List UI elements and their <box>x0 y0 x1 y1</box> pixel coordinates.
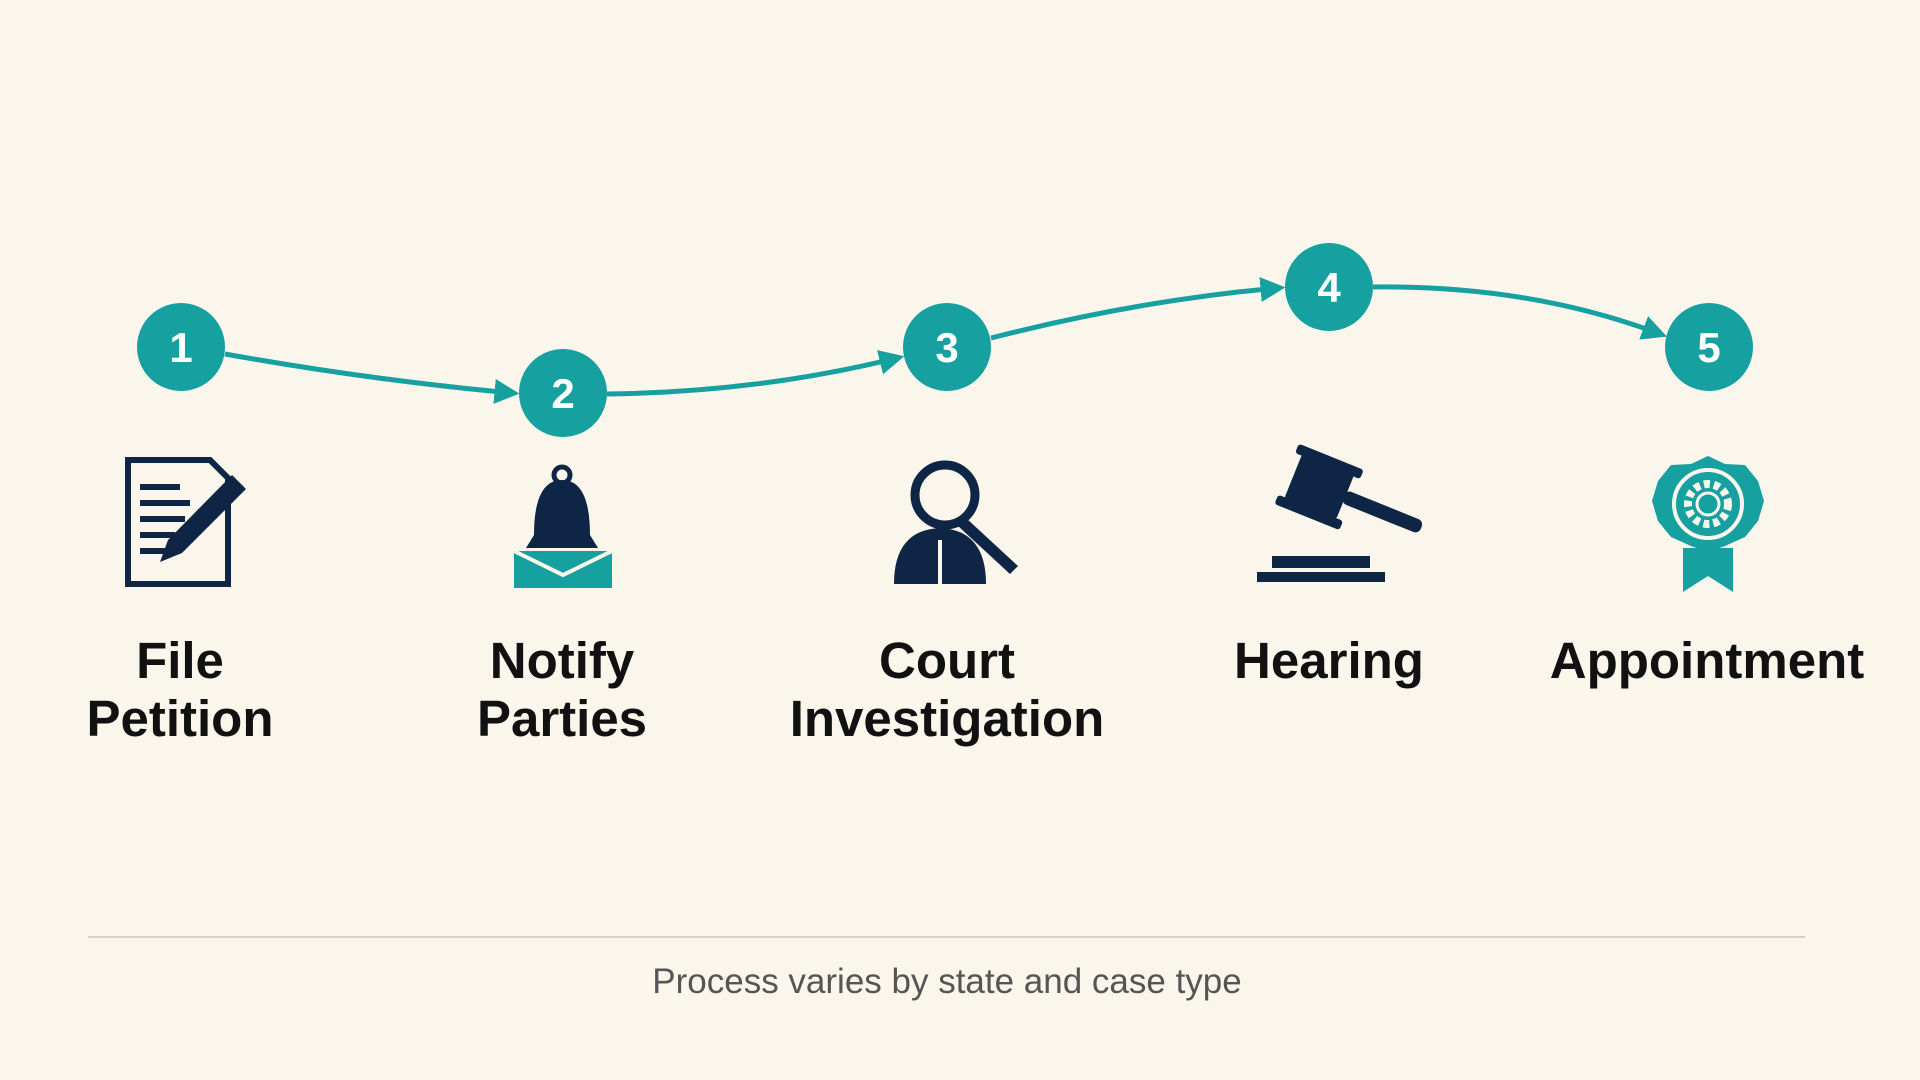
step circle 4 <box>1285 243 1373 331</box>
label: Court Investigation <box>790 632 1104 747</box>
step circle 5: 5 <box>1697 324 1721 371</box>
step circle 1 <box>137 303 225 391</box>
arrow 1-2 <box>225 354 512 393</box>
icon: bell with envelope <box>514 467 612 588</box>
label: Notify Parties: Notify <box>490 632 634 689</box>
step circle 5 <box>1665 303 1753 391</box>
label: File Petition: Petition <box>86 690 274 747</box>
icon: award badge <box>1652 456 1764 592</box>
step circle 1: 1 <box>169 324 193 371</box>
label: File Petition: File <box>136 632 224 689</box>
label: Hearing: Hearing <box>1234 632 1424 689</box>
step circle 3 <box>903 303 991 391</box>
label: Notify Parties <box>477 632 647 747</box>
label: Notify Parties: Parties <box>477 690 647 747</box>
step circle 4: 4 <box>1317 264 1341 311</box>
arrow 4-5 <box>1373 287 1660 334</box>
arrow 3-4 <box>991 288 1278 338</box>
label: Court Investigation: Court <box>879 632 1015 689</box>
step circle 2 <box>519 349 607 437</box>
footer note: Process varies by state and case type <box>652 962 1242 1001</box>
icon: gavel <box>1257 444 1433 582</box>
step circle 2: 2 <box>551 370 575 417</box>
arrow 2-3 <box>607 358 897 394</box>
icon: person with magnifier <box>894 465 1018 584</box>
label: Court Investigation: Investigation <box>790 690 1104 747</box>
label: File Petition <box>86 632 274 747</box>
icon: document with pen <box>128 460 246 584</box>
step circle 3: 3 <box>935 324 959 371</box>
label: Appointment: Appointment <box>1550 632 1864 689</box>
